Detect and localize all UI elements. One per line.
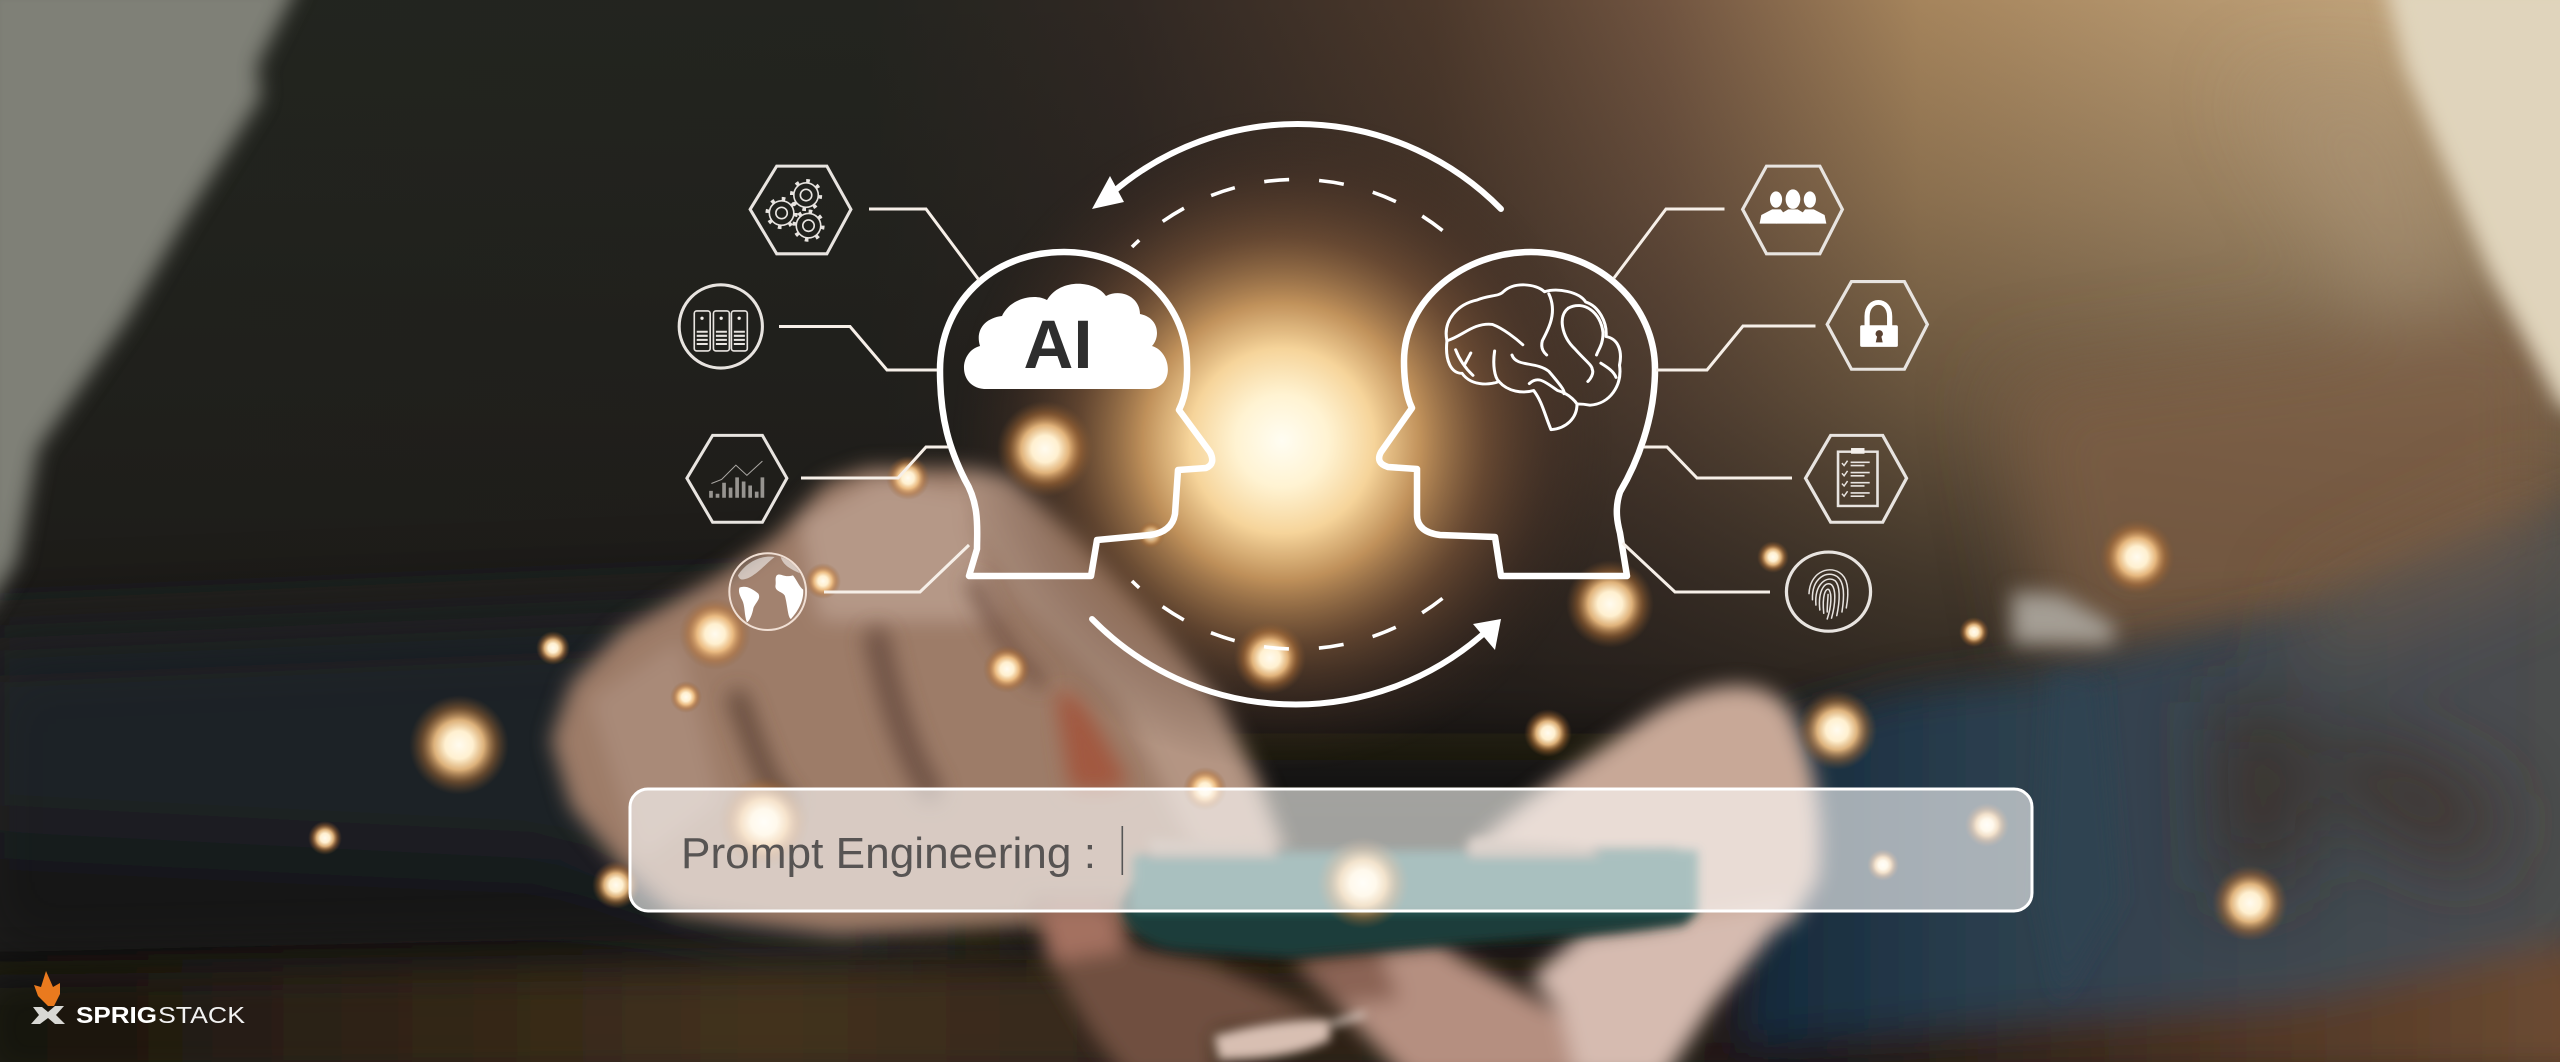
prompt label: Prompt Engineering : (681, 829, 1096, 878)
icon: checklist hexagon (1806, 435, 1907, 522)
phone (1120, 838, 1698, 957)
icon: fingerprint circle (1786, 552, 1871, 631)
icon: chart hexagon (687, 435, 787, 522)
icon: AI cloud: AI (1024, 306, 1092, 383)
right head outline (1379, 252, 1655, 576)
icon: globe (729, 553, 806, 630)
left head outline (940, 252, 1212, 576)
bottom curved arrow (1092, 619, 1501, 704)
icon: people hexagon (1743, 166, 1842, 254)
glow particles (308, 401, 2288, 941)
top curved arrow (1092, 124, 1501, 209)
logo: SprigStack: SPRIG (76, 1002, 157, 1028)
right hand (1031, 686, 1820, 1062)
icon: gears hexagon (750, 166, 851, 254)
logo flame (34, 971, 60, 1006)
dashed orbit (1132, 179, 1462, 649)
icon: servers circle (679, 285, 762, 368)
logo crossed logs (31, 1006, 65, 1024)
prompt input box (630, 789, 2032, 911)
icon: AI cloud (964, 284, 1168, 389)
logo: SprigStack: STACK (158, 1002, 246, 1028)
central glow (952, 111, 1612, 771)
icon: brain (1446, 285, 1620, 430)
logo: SprigStack (31, 971, 246, 1028)
icon: lock hexagon (1827, 282, 1927, 369)
connector lines: left (779, 209, 979, 592)
connector lines: right (1614, 209, 1816, 592)
text cursor (1122, 826, 1123, 875)
left hand (551, 468, 1285, 935)
